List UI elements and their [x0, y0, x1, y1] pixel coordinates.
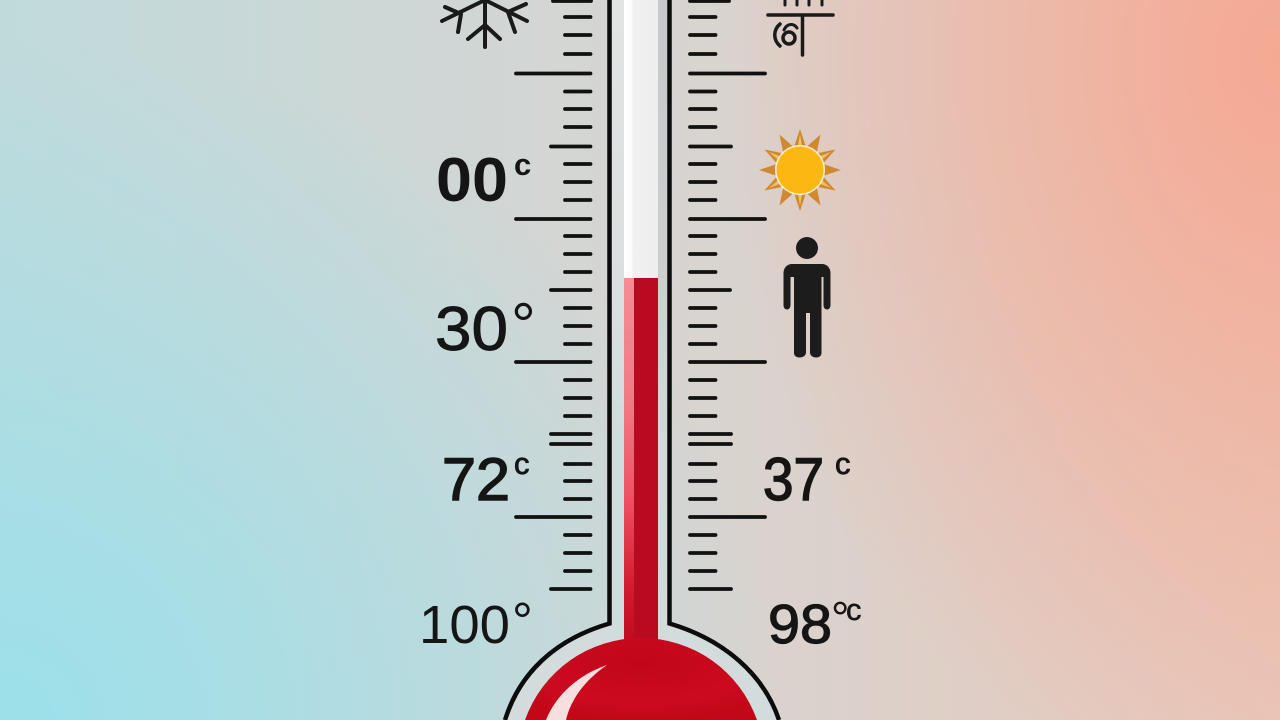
bulb highlight — [546, 665, 607, 720]
right scale ticks — [690, 1, 765, 589]
label: 30 degrees: 30 — [435, 295, 508, 364]
label: 72 c: 72 — [442, 446, 510, 513]
label: 98 degrees c: 98 — [768, 593, 832, 655]
label: 72 c: c — [514, 446, 530, 481]
label: 00 c: c — [514, 147, 531, 182]
label: 30 degrees: ° — [511, 291, 536, 360]
icon: person — [784, 237, 830, 358]
icon: rain gauge symbol — [768, 0, 833, 55]
mercury column — [624, 278, 658, 643]
label: 37 c: c — [835, 446, 850, 481]
label: 98 degrees c: ° — [831, 592, 849, 644]
icon: snowflake — [442, 0, 527, 47]
label: 00 c: 00 — [436, 146, 508, 215]
label: 30 degrees — [435, 291, 536, 364]
label: 100 degrees: 100 — [419, 595, 510, 655]
label: 98 degrees c — [768, 592, 862, 655]
tube outline — [505, 0, 779, 720]
label: 100 degrees: ° — [512, 593, 533, 651]
label: 37 c: 37 — [763, 446, 824, 513]
icon: sun — [759, 129, 841, 211]
label: 98 degrees c: c — [846, 592, 862, 627]
left scale ticks — [516, 1, 591, 589]
thermometer glass tube and bulb — [505, 0, 780, 720]
mercury bulb — [525, 638, 757, 720]
